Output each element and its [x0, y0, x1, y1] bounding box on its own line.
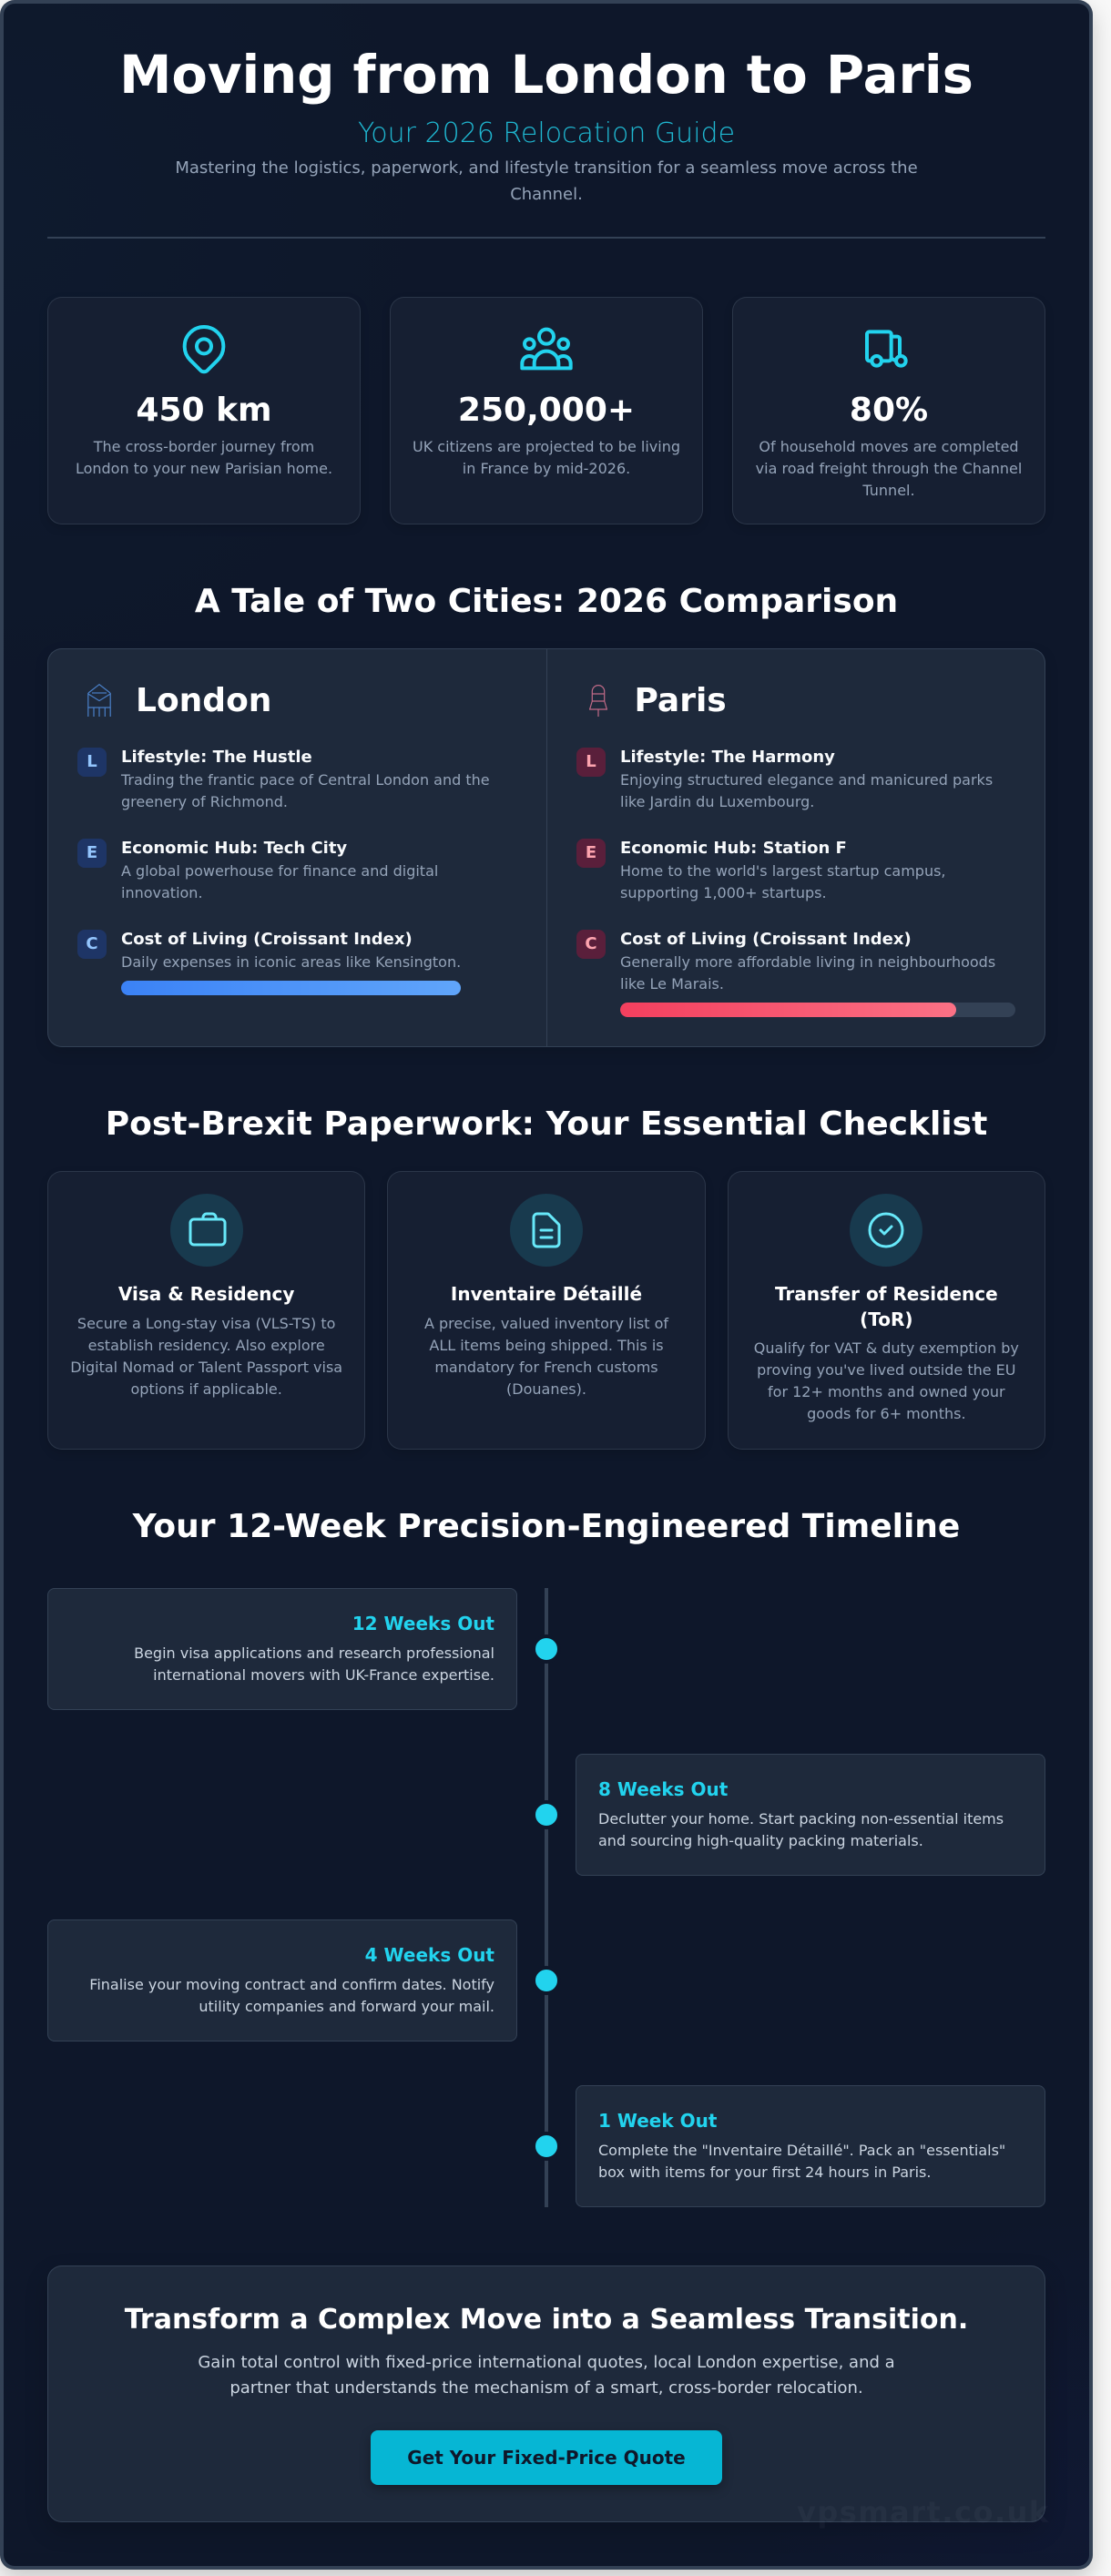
card text: goods for 6+ months. — [807, 1405, 966, 1422]
badge: L: L — [586, 752, 596, 771]
stat description: Tunnel. — [862, 481, 915, 499]
london economic text: innovation. — [121, 884, 203, 901]
paris cost title: Cost of Living (Croissant Index) — [620, 930, 912, 949]
paris cost text: like Le Marais. — [620, 975, 724, 993]
panel: city comparison — [47, 648, 1045, 1047]
card text: mandatory for French customs — [434, 1359, 658, 1375]
paris economic text — [620, 862, 945, 901]
card title: Visa & Residency — [118, 1283, 294, 1305]
icon: check circle — [850, 1194, 922, 1267]
paris economic title: Economic Hub: Station F — [620, 839, 847, 858]
step label: 1 Week Out — [598, 2110, 717, 2132]
timeline — [545, 1588, 548, 2207]
paris lifestyle text — [620, 771, 993, 810]
step text — [598, 1810, 1004, 1848]
badge: E: E — [87, 843, 97, 862]
cta text: Gain total control with fixed-price international quotes, local London expertise, and a — [198, 2353, 895, 2372]
step text: Declutter your home. Start packing non-essential items — [598, 1810, 1004, 1827]
panel: inventory — [387, 1171, 706, 1450]
stat description — [413, 437, 680, 477]
paris cost text — [620, 953, 995, 993]
cta heading: Transform a Complex Move into a Seamless Transition. — [125, 2304, 968, 2335]
step text: international movers with UK-France expertise. — [153, 1666, 494, 1683]
london lifestyle text: Trading the frantic pace of Central London and the — [121, 771, 490, 789]
paris economic text: Home to the world's largest startup campus, — [620, 862, 945, 880]
title: Moving from London to Paris — [119, 44, 973, 106]
step label: 4 Weeks Out — [365, 1944, 494, 1966]
stat value: 80% — [850, 392, 928, 428]
timeline dot — [532, 1800, 561, 1829]
icon: case — [170, 1194, 243, 1267]
panel: stat 250,000+ — [390, 297, 703, 524]
icon: map pin — [182, 325, 226, 373]
badge: C: C — [86, 934, 98, 953]
badge: C — [576, 930, 606, 959]
stat description — [76, 437, 332, 477]
card text: Secure a Long-stay visa (VLS-TS) to — [77, 1315, 335, 1331]
stat value: 250,000+ — [458, 392, 635, 428]
badge: L: L — [87, 752, 97, 771]
london lifestyle title: Lifestyle: The Hustle — [121, 748, 312, 767]
step text: Finalise your moving contract and confirm dates. Notify — [89, 1976, 494, 1992]
heading: checklist: Post-Brexit Paperwork: Your Essential Checklist — [106, 1105, 987, 1143]
stat description: Of household moves are completed — [759, 437, 1019, 455]
timeline dot — [532, 1966, 561, 1995]
timeline dot — [532, 1634, 561, 1664]
card text: for 12+ months and owned your — [768, 1383, 1005, 1400]
panel: stat 450 km — [47, 297, 361, 524]
card title: Transfer of Residence — [775, 1283, 998, 1305]
step text: utility companies and forward your mail. — [199, 1998, 494, 2014]
badge: L — [77, 748, 107, 777]
icon: document — [510, 1194, 583, 1267]
card title — [775, 1283, 998, 1330]
stat value: 450 km — [136, 392, 272, 428]
card text: Qualify for VAT & duty exemption by — [754, 1339, 1019, 1357]
panel: visa — [47, 1171, 365, 1450]
step label: 8 Weeks Out — [598, 1778, 728, 1800]
timeline dot — [532, 2132, 561, 2161]
icon: paris — [589, 685, 607, 717]
badge: C — [77, 930, 107, 959]
stat description: UK citizens are projected to be living — [413, 437, 680, 455]
intro text: Mastering the logistics, paperwork, and lifestyle transition for a seamless move across the — [175, 158, 918, 178]
stat description: London to your new Parisian home. — [76, 459, 332, 477]
stat description: in France by mid-2026. — [463, 459, 630, 477]
timeline step: 8 weeks — [576, 1754, 1045, 1876]
step text: and sourcing high-quality packing materials. — [598, 1832, 923, 1848]
card text: A precise, valued inventory list of — [424, 1315, 668, 1331]
london economic text: A global powerhouse for finance and digital — [121, 862, 438, 880]
stat description: The cross-border journey from — [94, 437, 314, 455]
card text: options if applicable. — [131, 1380, 282, 1397]
paris cost bar — [620, 1003, 1015, 1017]
cta button — [371, 2430, 722, 2485]
paris lifestyle title: Lifestyle: The Harmony — [620, 748, 835, 767]
card title: (ToR) — [860, 1308, 913, 1330]
london lifestyle text: greenery of Richmond. — [121, 793, 288, 810]
card text: proving you've lived outside the EU — [757, 1361, 1015, 1379]
badge: E — [576, 839, 606, 868]
icon: truck — [865, 330, 908, 368]
step text — [134, 1644, 494, 1683]
header — [47, 44, 1045, 239]
badge: L — [576, 748, 606, 777]
timeline step: 1 week — [576, 2085, 1045, 2207]
intro text: Channel. — [510, 185, 583, 204]
icon: people — [520, 328, 573, 370]
cta button: Get Your Fixed-Price Quote — [407, 2447, 686, 2469]
paris cost text: Generally more affordable living in neighbourhoods — [620, 953, 995, 971]
badge: C: C — [585, 934, 597, 953]
london cost title: Cost of Living (Croissant Index) — [121, 930, 413, 949]
step text — [89, 1976, 494, 2014]
badge: E — [77, 839, 107, 868]
icon: london — [87, 684, 111, 717]
step text — [598, 2142, 1005, 2180]
card text: establish residency. Also explore — [88, 1337, 325, 1353]
card text — [754, 1339, 1019, 1422]
paris lifestyle text: like Jardin du Luxembourg. — [620, 793, 814, 810]
panel: stat 80% — [732, 297, 1045, 524]
panel: call to action — [47, 2265, 1045, 2522]
cta text: partner that understands the mechanism of a smart, cross-border relocation. — [229, 2378, 863, 2398]
heading: comparison: A Tale of Two Cities: 2026 Comparison — [195, 583, 898, 619]
subtitle: Your 2026 Relocation Guide — [358, 117, 735, 149]
cta text — [198, 2353, 895, 2398]
badge: E: E — [586, 843, 596, 862]
timeline step: 4 weeks — [47, 1919, 517, 2041]
card text: Digital Nomad or Talent Passport visa — [70, 1359, 342, 1375]
london economic text — [121, 862, 438, 901]
stat description — [756, 437, 1022, 499]
step text: Complete the "Inventaire Détaillé". Pack an "essentials" — [598, 2142, 1005, 2158]
step label: 12 Weeks Out — [352, 1613, 494, 1634]
london cost text: Daily expenses in iconic areas like Kensington. — [121, 953, 461, 971]
london cost bar — [121, 981, 461, 995]
heading: london: London — [136, 681, 271, 719]
panel: transfer of residence — [728, 1171, 1045, 1450]
stat description: via road freight through the Channel — [756, 459, 1022, 477]
card text — [70, 1315, 342, 1397]
heading: timeline: Your 12-Week Precision-Engineered Timeline — [133, 1508, 960, 1544]
card text — [424, 1315, 668, 1397]
step text: Begin visa applications and research professional — [134, 1644, 494, 1661]
heading: paris: Paris — [634, 681, 727, 719]
step text: box with items for your first 24 hours in Paris. — [598, 2164, 931, 2180]
intro text — [175, 158, 918, 204]
card title: Inventaire Détaillé — [451, 1283, 642, 1305]
london economic title: Economic Hub: Tech City — [121, 839, 347, 858]
card text: ALL items being shipped. This is — [429, 1337, 664, 1353]
paris lifestyle text: Enjoying structured elegance and manicured parks — [620, 771, 993, 789]
timeline step: 12 weeks — [47, 1588, 517, 1710]
watermark: vpsmart.co.uk — [797, 2495, 1050, 2530]
card text: (Douanes). — [506, 1380, 586, 1397]
paris economic text: supporting 1,000+ startups. — [620, 884, 827, 901]
london lifestyle text — [120, 771, 490, 810]
